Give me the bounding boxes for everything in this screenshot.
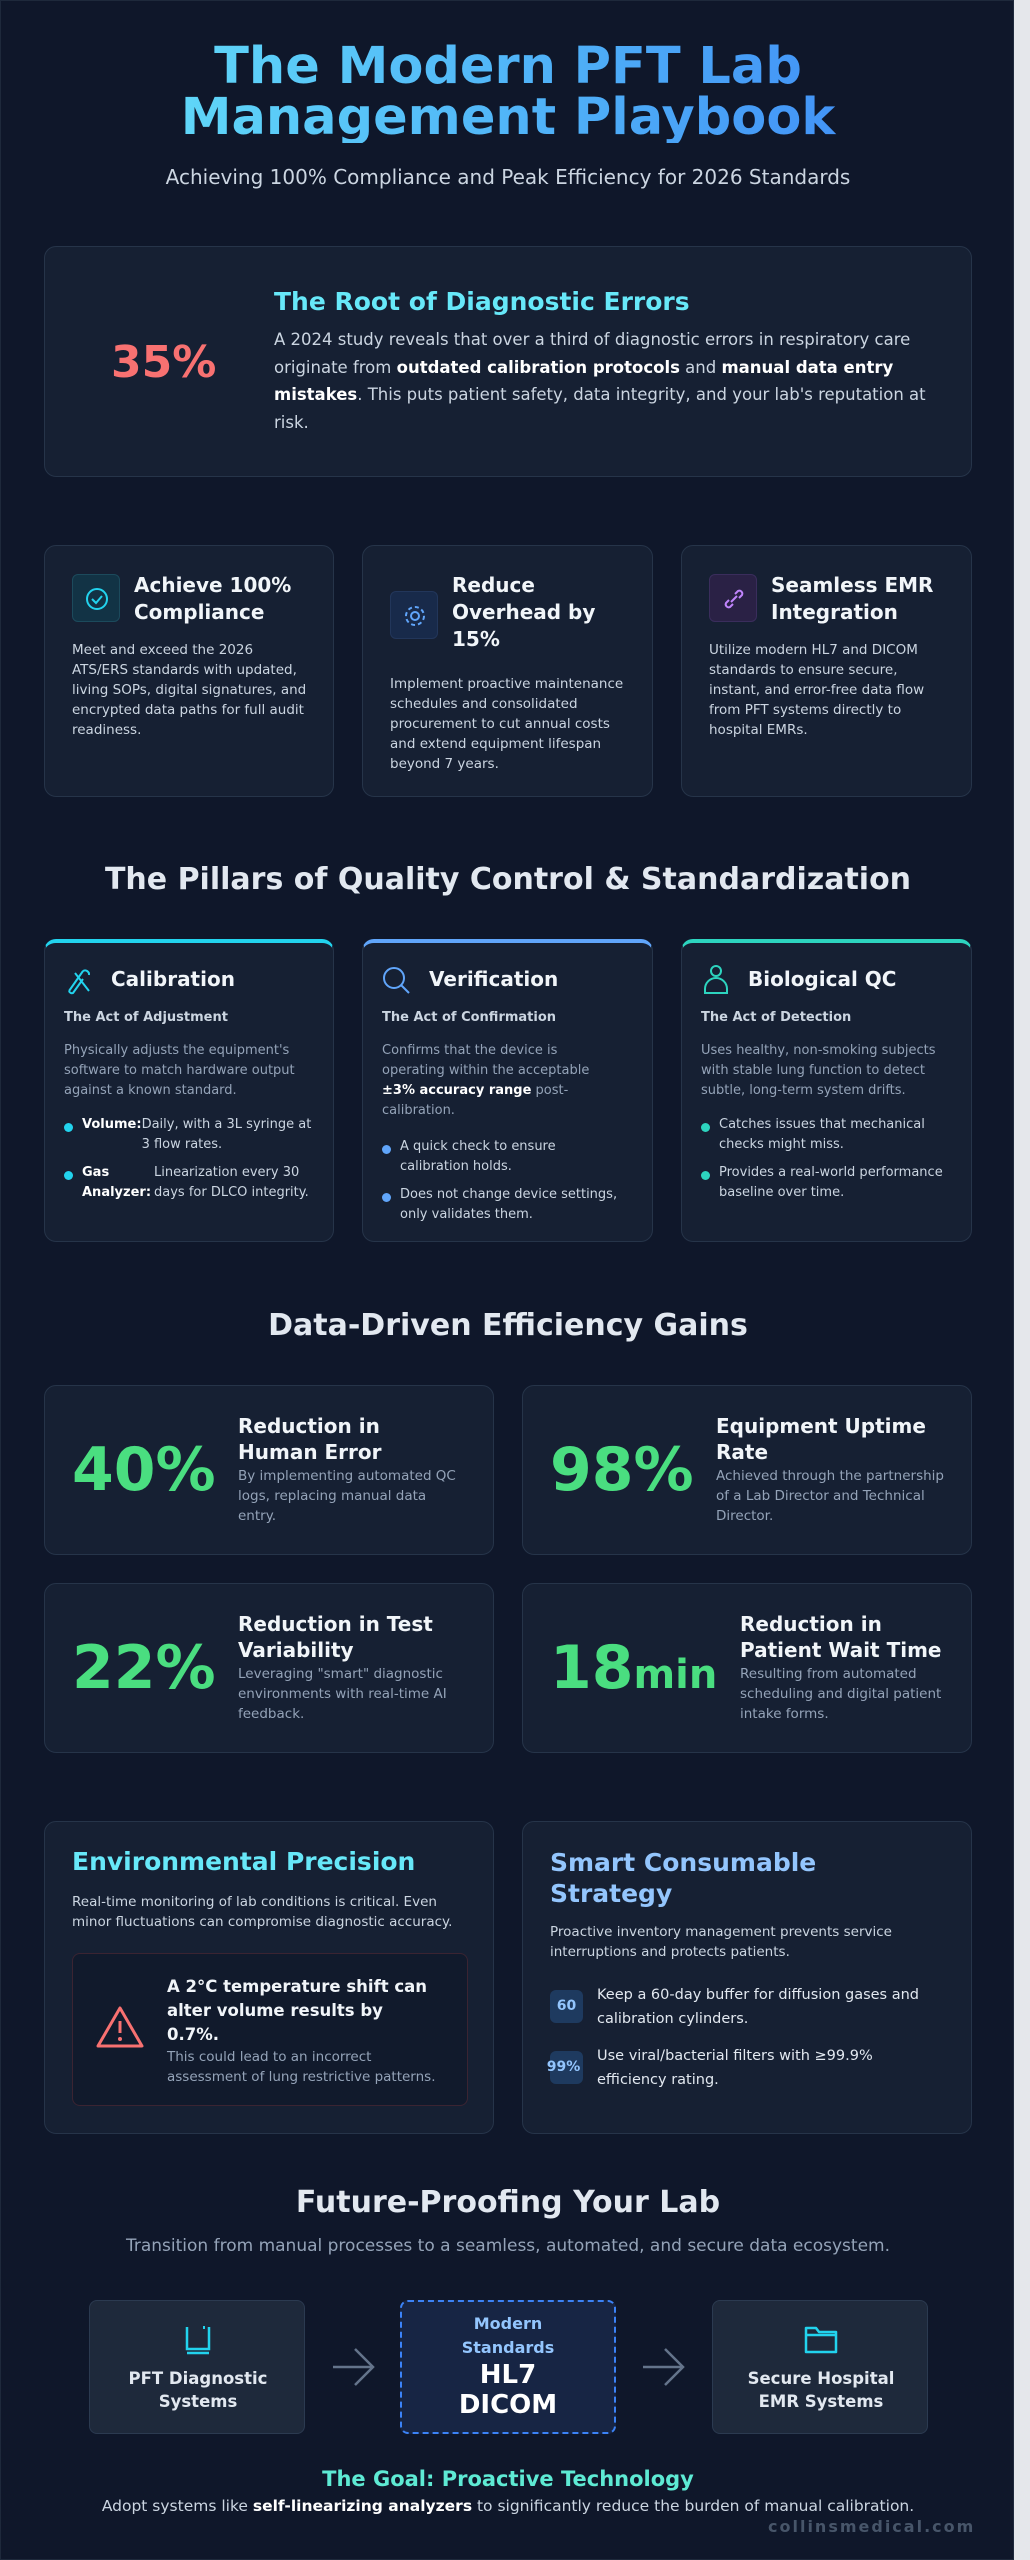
text: Proactive inventory management prevents service interruptions and protects patients. <box>550 1924 892 1960</box>
callout: warning: A 2°C temperature shift can alter volume results by 0.7%. <box>167 1977 427 2044</box>
stat card: 18min: Patient Wait Time <box>740 1638 941 1662</box>
icon: gear <box>390 591 438 639</box>
heading: Achieve 100% <box>134 573 291 597</box>
panel: verification <box>362 939 653 1242</box>
stat 35%: 35% <box>111 337 216 388</box>
heading: Reduce <box>452 573 535 597</box>
bullets <box>64 1117 312 1200</box>
stat card: 40%: By implementing automated QC logs, replacing manual data entry. <box>238 1468 456 1524</box>
heading: Environmental Precision <box>72 1847 415 1876</box>
stat card: 22%: 22% <box>72 1633 216 1703</box>
heading: pillars: The Pillars of Quality Control & Standardization <box>105 862 911 897</box>
stat card: 98%: Achieved through the partnership of a Lab Director and Technical Director. <box>716 1468 944 1524</box>
flow: modern standards <box>400 2300 616 2434</box>
icon: tools <box>68 969 90 994</box>
stat card: 22%: Variability <box>238 1638 354 1662</box>
flow: modern standards: DICOM <box>459 2390 557 2420</box>
bullets: Daily, with a 3L syringe at 3 flow rates. <box>142 1117 311 1152</box>
heading: Seamless EMR <box>771 573 933 597</box>
item: 60: 60 <box>557 1998 576 2014</box>
text: Meet and exceed the 2026 ATS/ERS standards with updated, living SOPs, digital signatures, and encrypted data paths for full audit readiness. <box>72 642 306 738</box>
heading: The Root of Diagnostic Errors <box>274 287 690 316</box>
heading: 15% <box>452 627 500 651</box>
stat card: 40%: 40% <box>72 1435 216 1505</box>
text: Confirms that the device is operating within the acceptable ±3% accuracy range post-calibration. <box>382 1043 589 1118</box>
text: Physically adjusts the equipment's software to match hardware output against a known standard. <box>64 1043 295 1098</box>
stat card: 40%: Reduction in <box>238 1414 380 1438</box>
subtitle: Achieving 100% Compliance and Peak Efficiency for 2026 Standards <box>166 165 850 189</box>
item: 99%: Use viral/bacterial filters with ≥99.9% efficiency rating. <box>597 2048 873 2088</box>
heading: Smart Consumable <box>550 1848 816 1877</box>
panel: environmental precision <box>44 1821 494 2134</box>
item: 60: Keep a 60-day buffer for diffusion gases and calibration cylinders. <box>597 1987 919 2027</box>
heading <box>134 573 291 624</box>
panel: root of errors <box>44 246 972 477</box>
panel: calibration <box>44 939 334 1242</box>
heading: Biological QC <box>748 967 896 991</box>
stat card: 98%: Rate <box>716 1440 768 1464</box>
stat card: 22%: Reduction in Test <box>238 1612 433 1636</box>
heading: Calibration <box>111 967 235 991</box>
bullets: Catches issues that mechanical checks might miss. <box>719 1117 925 1152</box>
subtitle: future: Transition from manual processes to a seamless, automated, and secure data ecosystem. <box>126 2236 890 2256</box>
callout: warning: This could lead to an incorrect assessment of lung restrictive patterns. <box>167 2049 436 2085</box>
flow: EMR systems <box>712 2300 928 2434</box>
stat card: 98% <box>522 1385 972 1555</box>
icon: link <box>709 574 757 622</box>
stat card: 18min: Resulting from automated scheduling and digital patient intake forms. <box>740 1666 941 1722</box>
body text: A 2024 study reveals that over a third of diagnostic errors in respiratory care originate from outdated calibration protocols and manual data entry mistakes. This puts patient safety, data integrity, and your lab's reputation at risk. <box>274 330 926 432</box>
heading: Integration <box>771 600 898 624</box>
title: Management Playbook <box>181 88 835 147</box>
arrow <box>333 2348 375 2386</box>
heading: future-proofing: Future-Proofing Your Lab <box>296 2185 720 2220</box>
bullets <box>382 1139 617 1222</box>
panel: biological QC <box>681 939 972 1242</box>
flow: modern standards: Modern <box>474 2314 542 2333</box>
flow: EMR systems: EMR Systems <box>759 2392 883 2411</box>
icon: warning triangle <box>96 2006 144 2048</box>
goal text: Adopt systems like self-linearizing analyzers to significantly reduce the burden of manual calibration. <box>102 2497 914 2515</box>
heading <box>771 573 933 624</box>
stat card: 22% <box>44 1583 494 1753</box>
stat card: 22%: Leveraging "smart" diagnostic environments with real-time AI feedback. <box>238 1666 447 1722</box>
arrow <box>643 2348 685 2386</box>
stat card: 18min: 18min <box>550 1633 717 1703</box>
stat card: 98%: Equipment Uptime <box>716 1414 926 1438</box>
heading <box>550 1848 816 1908</box>
bullets: Provides a real-world performance baseline over time. <box>719 1165 943 1200</box>
text: Implement proactive maintenance schedules and consolidated procurement to cut annual costs and extend equipment lifespan beyond 7 years. <box>390 676 623 772</box>
stat card: 98%: 98% <box>550 1435 694 1505</box>
text: Utilize modern HL7 and DICOM standards to ensure secure, instant, and error-free data flow from PFT systems directly to hospital EMRs. <box>709 642 924 738</box>
flow: PFT systems: PFT Diagnostic <box>129 2369 267 2388</box>
stat card: 40%: Human Error <box>238 1440 382 1464</box>
heading <box>452 573 595 651</box>
heading: Overhead by <box>452 600 595 624</box>
heading: efficiency: Data-Driven Efficiency Gains <box>268 1308 748 1343</box>
bullets <box>701 1117 943 1200</box>
text: Uses healthy, non-smoking subjects with stable lung function to detect subtle, long-term system drifts. <box>701 1043 935 1098</box>
subheading: The Act of Detection <box>701 1010 851 1025</box>
footer brand: collinsmedical.com <box>768 2517 975 2536</box>
heading: Verification <box>429 967 558 991</box>
heading: Strategy <box>550 1879 672 1908</box>
stat card: 18min: Reduction in <box>740 1612 882 1636</box>
bullets: calibration holds. <box>400 1159 512 1174</box>
bullets: Does not change device settings, only validates them. <box>400 1187 617 1222</box>
flow: PFT systems: Systems <box>159 2392 237 2411</box>
subheading: The Act of Adjustment <box>64 1010 228 1025</box>
flow: PFT systems <box>89 2300 305 2434</box>
stat card: 18min <box>522 1583 972 1753</box>
panel: smart consumables <box>522 1821 972 2134</box>
bullets: Volume: <box>82 1117 142 1132</box>
bullets: A quick check to ensure <box>400 1139 556 1154</box>
item: 99%: 99% <box>547 2059 580 2075</box>
bullets: Gas Analyzer: <box>82 1165 151 1200</box>
stat card: 40% <box>44 1385 494 1555</box>
subheading: The Act of Confirmation <box>382 1010 556 1025</box>
icon: magnifier <box>383 967 410 994</box>
panel: overhead <box>362 545 653 797</box>
panel: EMR <box>681 545 972 797</box>
heading: Compliance <box>134 600 264 624</box>
text: Real-time monitoring of lab conditions is critical. Even minor fluctuations can compromise diagnostic accuracy. <box>72 1894 452 1930</box>
goal heading: The Goal: Proactive Technology <box>322 2467 694 2491</box>
callout: warning <box>72 1953 468 2106</box>
title: The Modern PFT Lab <box>214 37 802 96</box>
flow: modern standards: HL7 <box>480 2360 536 2390</box>
title <box>1 41 1015 143</box>
icon: check <box>72 574 120 622</box>
bullets: Linearization every 30 days for DLCO integrity. <box>154 1165 309 1200</box>
icon: person <box>704 965 728 994</box>
panel: compliance <box>44 545 334 797</box>
flow: EMR systems: Secure Hospital <box>748 2369 894 2388</box>
flow: modern standards: Standards <box>462 2338 554 2357</box>
